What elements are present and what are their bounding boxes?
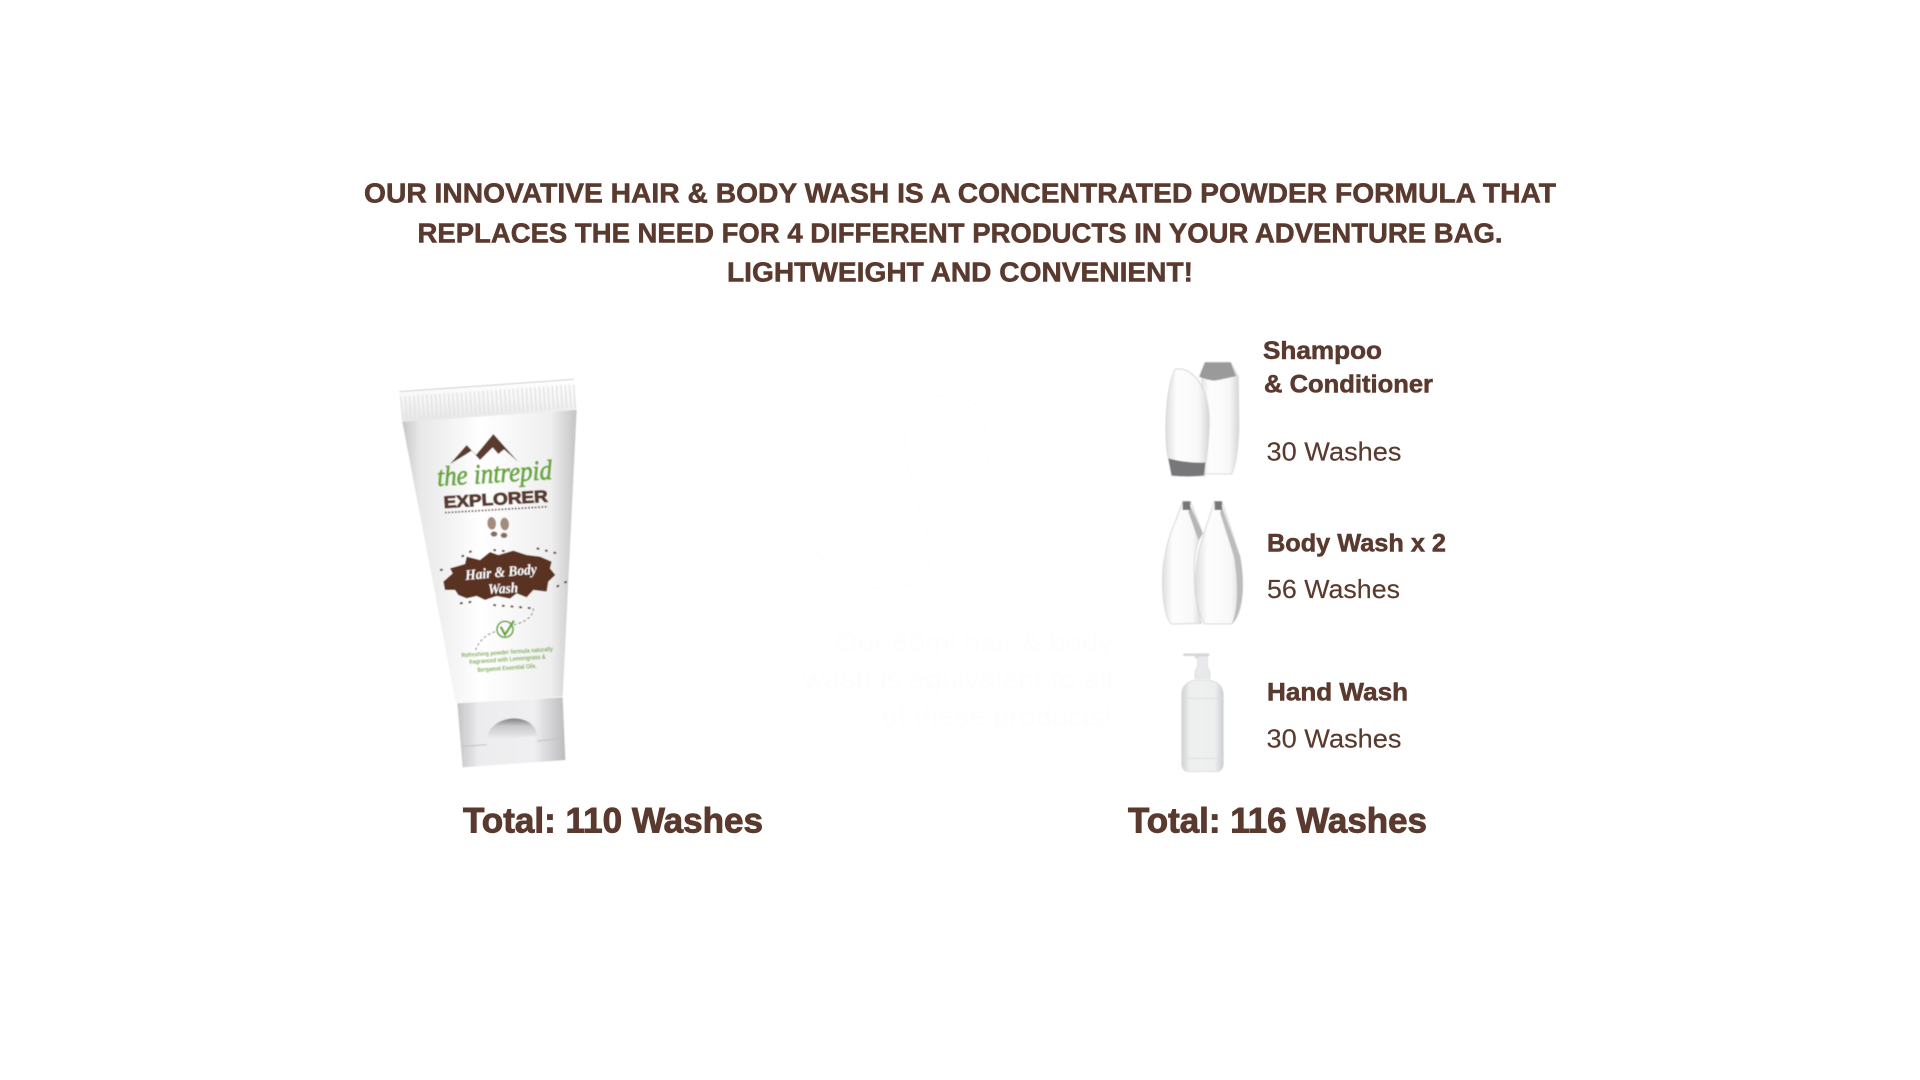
faint caption: Our 60ml hair & body [835,628,1113,658]
text: body wash: Body Wash x 2 [1267,530,1446,558]
text: hand wash: 30 Washes [1266,723,1402,753]
text: hand wash [1266,679,1408,753]
heading [364,178,1556,288]
product tube: hair and body wash: Bergamot Essential Oils. [477,663,537,674]
faint dashed arrow [656,395,1110,589]
icon: hand wash pump bottle [1182,653,1223,772]
product tube: hair and body wash: the intrepid [436,455,554,493]
total: separate product washes: Total: 116 Washes [1128,802,1427,841]
faint caption [802,628,1113,731]
icon: two body wash bottles [1163,501,1243,624]
product tube: hair and body wash: Hair & Body [464,562,538,584]
text: shampoo and conditioner: Shampoo [1263,337,1382,365]
heading: REPLACES THE NEED FOR 4 DIFFERENT PRODUCTS IN YOUR ADVENTURE BAG. [418,218,1502,248]
faint caption: wash is equivalent to all [802,664,1113,694]
total: tube washes: Total: 110 Washes [463,802,763,841]
product tube: hair and body wash: Refreshing powder formula naturally [461,646,554,659]
text: hand wash: Hand Wash [1267,679,1408,707]
product tube: hair and body wash: fragranced with Lemongrass & [469,654,546,666]
text: shampoo and conditioner [1263,337,1433,467]
text: body wash: 56 Washes [1267,574,1400,604]
heading: OUR INNOVATIVE HAIR & BODY WASH IS A CONCENTRATED POWDER FORMULA THAT [364,178,1556,208]
text: shampoo and conditioner: & Conditioner [1264,370,1433,398]
product tube: hair and body wash [399,379,577,767]
text: shampoo and conditioner: 30 Washes [1266,437,1402,467]
heading: LIGHTWEIGHT AND CONVENIENT! [727,256,1193,288]
faint caption: of these products! [882,701,1113,731]
text: body wash [1267,530,1446,604]
icon: shampoo and conditioner bottles [1166,362,1239,476]
product tube: hair and body wash: Wash [488,580,519,598]
product tube: hair and body wash: EXPLORER [443,487,548,512]
